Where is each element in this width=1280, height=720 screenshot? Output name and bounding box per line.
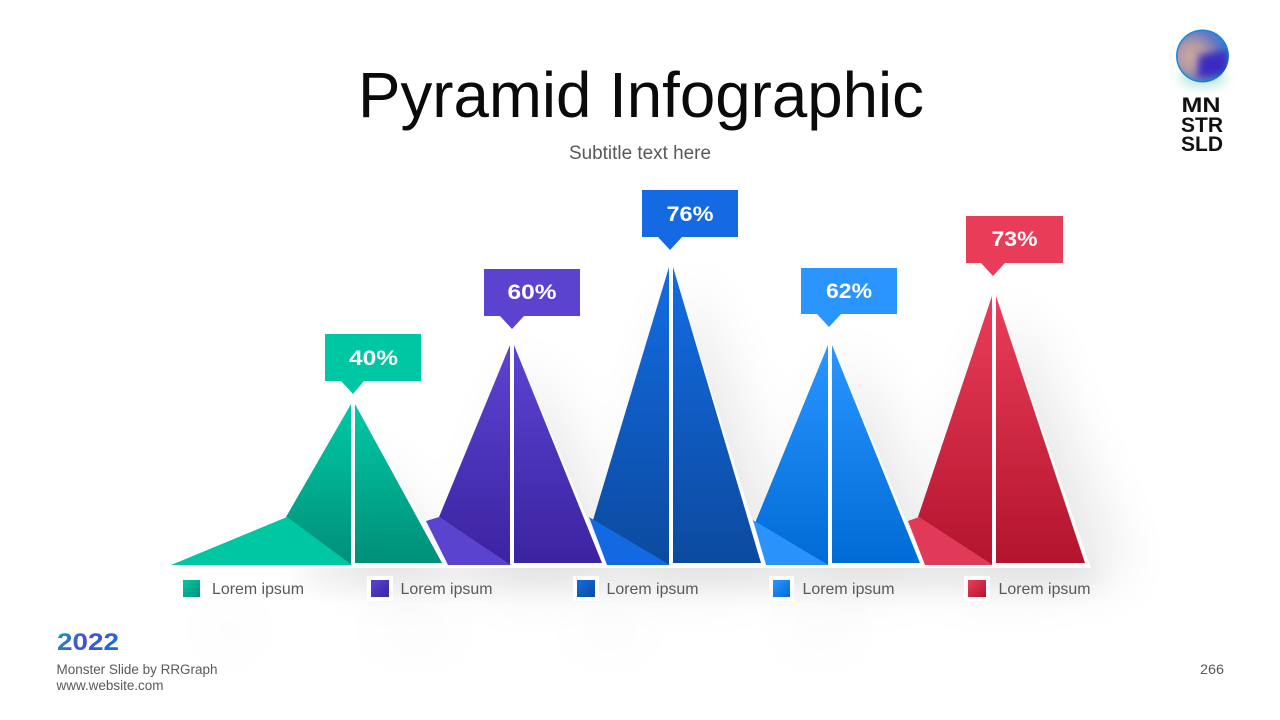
subtitle: Subtitle text here bbox=[569, 143, 711, 164]
page number: 266 bbox=[1200, 661, 1224, 677]
legend item: purple: Lorem ipsum bbox=[400, 581, 492, 598]
legend item: light blue: Lorem ipsum bbox=[802, 581, 894, 598]
soft band under the base bbox=[300, 560, 1100, 586]
callout: 60%: 60% bbox=[508, 281, 557, 304]
legend item: blue: Lorem ipsum bbox=[606, 581, 698, 598]
pyramid: 73% red bbox=[908, 216, 1091, 568]
callout: 76% bbox=[642, 190, 738, 250]
logo wordmark bbox=[1181, 93, 1223, 156]
pyramid: 60% purple bbox=[426, 269, 608, 568]
legend bbox=[183, 576, 1090, 601]
callout: 40%: 40% bbox=[349, 347, 398, 370]
legend item: blue bbox=[573, 576, 698, 601]
logo wordmark: SLD bbox=[1181, 132, 1223, 156]
legend item: teal: Lorem ipsum bbox=[212, 581, 304, 598]
title: Pyramid Infographic bbox=[358, 59, 924, 131]
pyramid: 40% teal bbox=[171, 334, 448, 568]
legend item: red bbox=[964, 576, 1090, 601]
callout: 73%: 73% bbox=[992, 228, 1038, 251]
footer credit: Monster Slide by RRGraph bbox=[56, 662, 218, 677]
callout: 62%: 62% bbox=[826, 280, 872, 303]
footer website: www.website.com bbox=[56, 678, 164, 693]
faint lower reflections bbox=[200, 610, 860, 650]
legend item: red: Lorem ipsum bbox=[998, 581, 1090, 598]
logo wordmark: MN bbox=[1182, 93, 1220, 117]
pyramid: 62% light blue bbox=[753, 268, 926, 568]
pyramid: 76% blue bbox=[589, 190, 767, 568]
logo bbox=[1176, 30, 1229, 156]
callout: 76%: 76% bbox=[666, 203, 714, 226]
callout: 40% bbox=[325, 334, 421, 394]
soft pyramid shadows bbox=[340, 280, 1125, 585]
icon: logo sphere bbox=[1176, 30, 1229, 88]
callout: 62% bbox=[801, 268, 897, 327]
callout: 73% bbox=[966, 216, 1063, 276]
legend item: light blue bbox=[769, 576, 894, 601]
callout: 60% bbox=[484, 269, 580, 329]
logo wordmark: STR bbox=[1181, 113, 1223, 137]
legend item: purple bbox=[367, 576, 492, 601]
footer year: 2022 bbox=[57, 629, 119, 656]
